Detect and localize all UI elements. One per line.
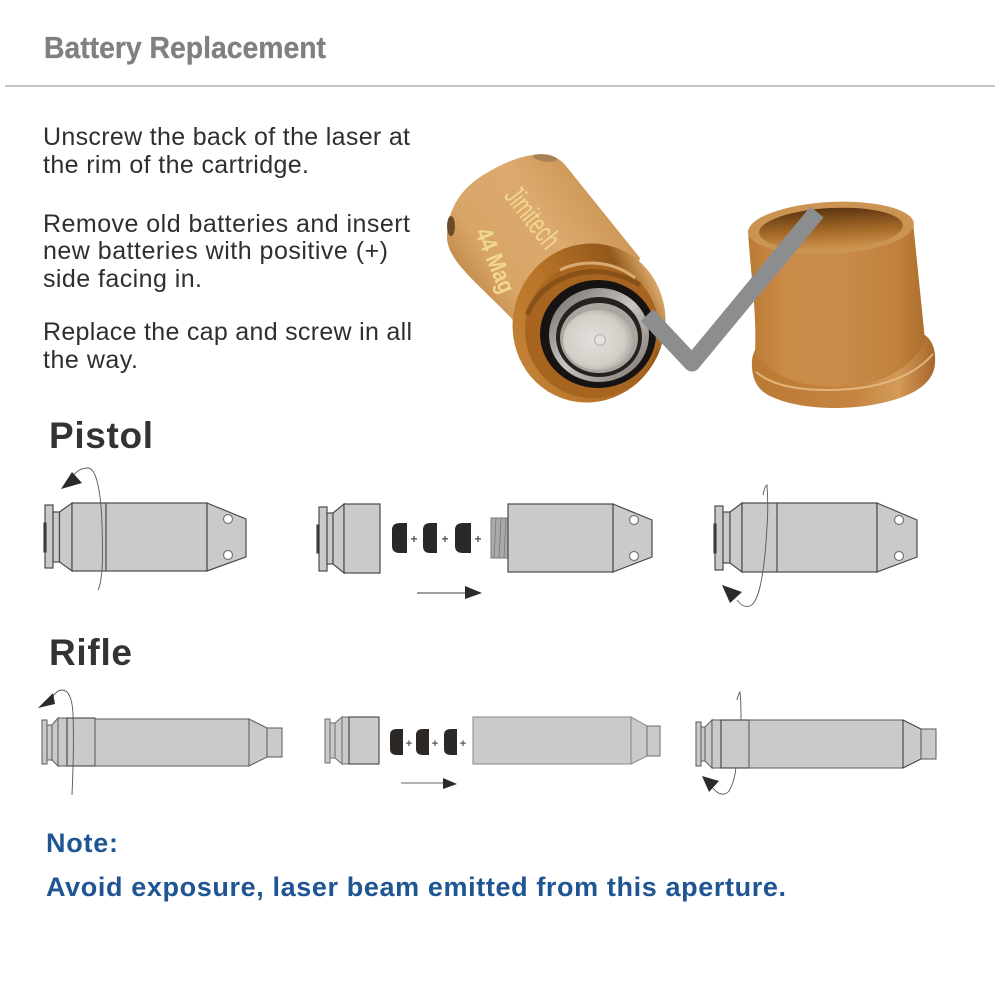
instructions text: Unscrew the back of the laser at	[43, 123, 410, 151]
rifle step 2: replace batteries: +	[460, 738, 466, 750]
pistol step 2: replace batteries: +	[441, 532, 449, 546]
instructions text	[43, 123, 412, 374]
rifle step 2: replace batteries: +	[432, 738, 438, 750]
instructions text: Remove old batteries and insert	[43, 210, 410, 238]
note text: Avoid exposure, laser beam emitted from this aperture.	[46, 872, 786, 902]
heading: Rifle: Rifle	[49, 632, 132, 673]
pistol step 2: replace batteries	[317, 504, 652, 599]
pistol step 2: replace batteries: +	[474, 532, 482, 546]
photo: opened laser cartridge with battery: Jimitech	[497, 180, 567, 255]
instructions text: side facing in.	[43, 265, 202, 293]
photo: opened laser cartridge with battery: 44 Mag	[469, 224, 520, 297]
photo: opened laser cartridge with battery	[447, 153, 688, 424]
pistol step 1: unscrew	[44, 468, 246, 590]
instructions text: the way.	[43, 346, 138, 374]
instructions text: Replace the cap and screw in all	[43, 318, 412, 346]
heading: Pistol: Pistol	[49, 415, 153, 456]
rifle step 2: replace batteries	[325, 717, 660, 789]
photo: screw cap	[747, 198, 935, 408]
instructions text: the rim of the cartridge.	[43, 151, 309, 179]
rifle step 2: replace batteries: +	[406, 738, 412, 750]
rifle step 3: screw back	[696, 692, 936, 794]
pistol step 3: screw back	[714, 485, 917, 607]
check mark	[647, 212, 817, 363]
instructions text: new batteries with positive (+)	[43, 237, 388, 265]
title: Battery Replacement	[44, 30, 326, 65]
pistol step 2: replace batteries: +	[410, 532, 418, 546]
note heading: Note:	[46, 828, 118, 858]
rifle step 1: unscrew	[38, 690, 282, 795]
